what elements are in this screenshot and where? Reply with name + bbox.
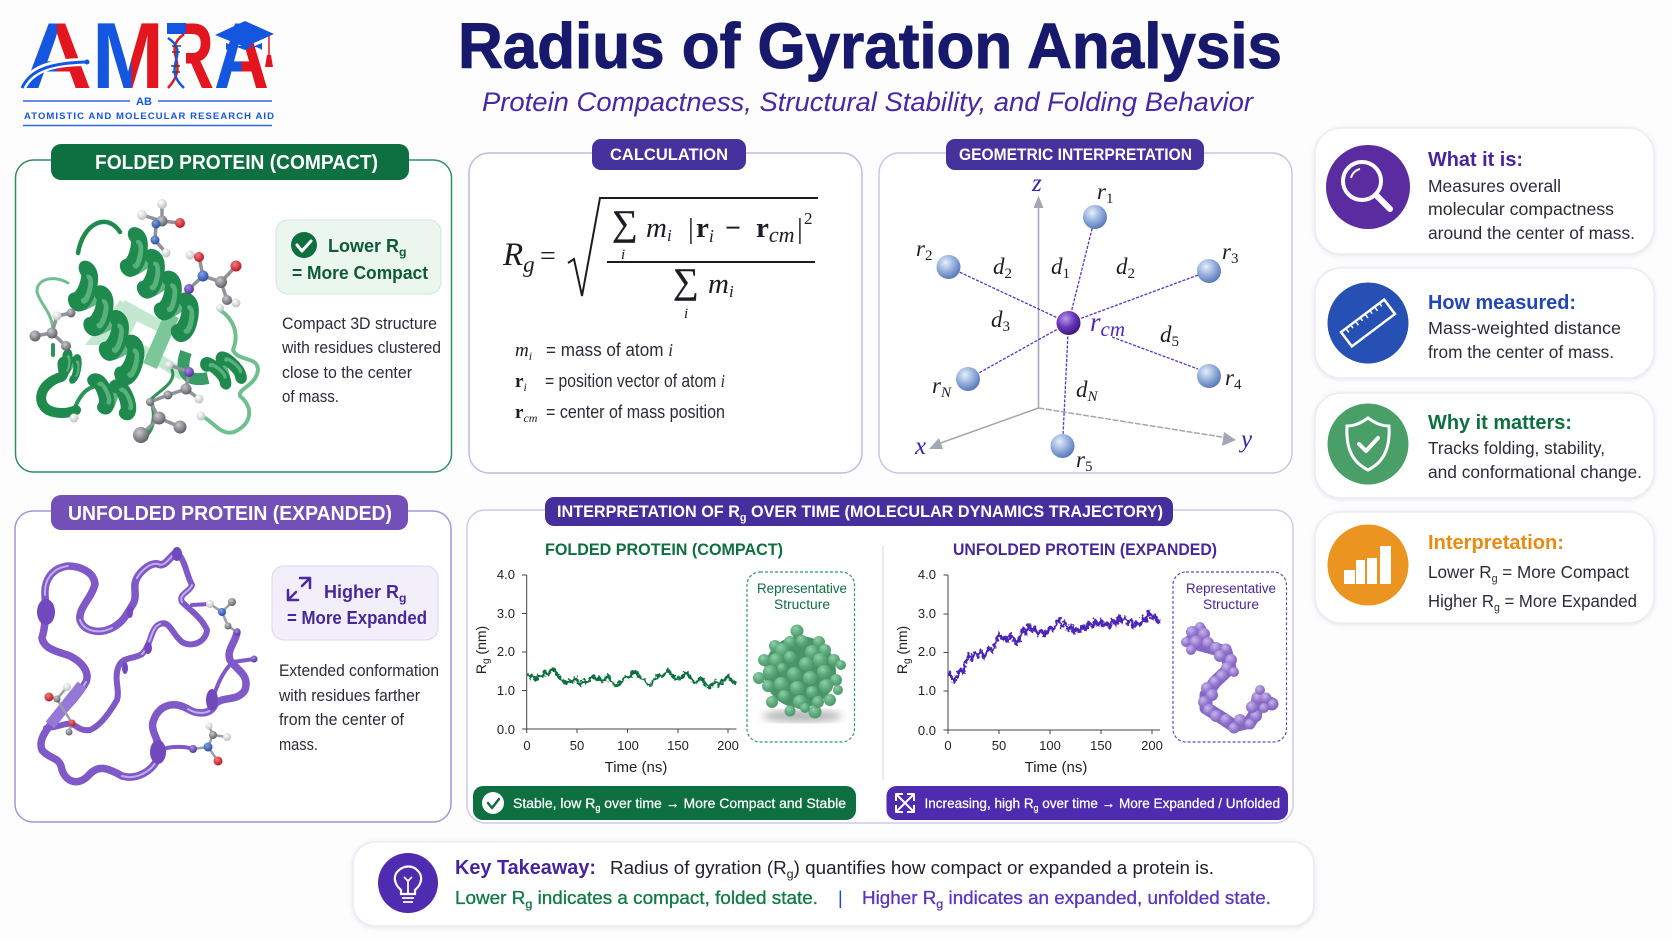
formula: radius of gyration: − [725,213,741,244]
line chart: folded Rg: Time (ns) [605,759,667,776]
diagram: labels: r [1225,365,1234,390]
central strand [150,315,172,366]
formula: radius of gyration: ∑ [673,261,699,301]
heading: Rg over time: g [740,512,747,524]
line chart: unfolded Rg: g [902,658,913,664]
formula: radius of gyration: i [729,282,734,301]
inset: folded representative structure: Structure [774,597,830,612]
diagram: labels: r [916,236,925,261]
panel: key takeaway: Key Takeaway: [455,857,596,879]
panel: key takeaway [353,842,1314,926]
line chart: unfolded Rg: R [894,664,910,674]
card: interpretation: Interpretation: [1428,531,1564,554]
card: what it is: around the center of mass. [1428,223,1635,243]
card: why it matters: Tracks folding, stability, [1428,438,1605,458]
diagram: labels: y [1238,426,1253,453]
inset: unfolded representative structure: Structure [1203,597,1259,612]
heading: unfolded protein [51,495,408,530]
formula: radius of gyration: m [708,268,729,300]
line chart: folded Rg: 150 [667,738,689,753]
helix: right small [206,354,243,387]
inset: folded representative structure [747,572,854,742]
panel: key takeaway: indicates an expanded, unfolded state. [943,888,1271,908]
panel: key takeaway: g [787,867,794,881]
subheading: folded chart: FOLDED PROTEIN (COMPACT) [545,541,783,559]
card: interpretation: Lower R [1428,562,1493,582]
text: folded description: Compact 3D structure [282,314,437,333]
formula: radius of gyration: i [684,306,688,322]
line chart: unfolded Rg: 2.0 [918,644,936,659]
legend: formula variables: cm [523,411,538,425]
logo letters AMRA: A [22,3,92,108]
panel: key takeaway: ) quantifies how compact or expanded a protein is. [794,858,1214,878]
small left coil [41,361,76,413]
icon: expand arrows [896,794,914,812]
line chart: folded Rg: R [473,664,489,674]
line chart: unfolded Rg: 1.0 [918,683,936,698]
line chart: unfolded Rg: 150 [1090,738,1112,753]
logo divider with emblem: AB [136,96,152,108]
diagram: labels: 2 [925,248,932,264]
diagram: labels: d [1051,254,1062,279]
formula: radius of gyration: | [688,213,694,245]
logo letters AMRA: M [92,3,164,108]
icon: graduation cap [215,21,274,67]
line chart: folded Rg: (nm) [473,626,489,658]
legend: formula variables: r [515,402,523,423]
ball-and-stick residues [44,598,258,766]
line chart: folded Rg: 200 [717,738,739,753]
heading: geometric interpretation [946,139,1204,170]
line chart: folded Rg: g [481,658,492,664]
title: Radius of Gyration Analysis [458,10,1282,82]
callout pill: unfolded conclusion: g [1034,803,1038,813]
card: interpretation: Higher R [1428,591,1497,611]
card: interpretation: g [1494,602,1500,614]
panel: key takeaway: g [525,897,532,911]
line chart: unfolded Rg: 0.0 [918,723,936,738]
card: how measured: from the center of mass. [1428,342,1614,362]
callout pill: unfolded conclusion [886,786,1288,820]
diagram: labels: N [1086,389,1098,405]
inset: unfolded representative structure: Representative [1186,581,1276,596]
panel: folded protein [16,144,452,472]
panel: geometric interpretation [879,139,1292,475]
diagram: labels: r [1097,179,1106,204]
panel: Rg over time [467,497,1293,823]
card: interpretation: g [1492,573,1498,585]
heading: calculation: CALCULATION [610,145,728,164]
callout: higher Rg: Higher R [324,582,399,602]
callout: higher Rg: = More Expanded [287,608,427,628]
logo letters AMRA [22,3,269,108]
formula: radius of gyration: g [523,252,535,277]
diagram: labels: cm [1101,317,1125,341]
panel: key takeaway: Higher R [862,888,933,908]
diagram: labels: d [1160,322,1172,347]
callout: lower Rg [276,220,441,294]
heading: Rg over time: INTERPRETATION OF R [557,503,743,521]
logo divider with emblem [23,96,272,126]
panel: key takeaway: | [838,888,843,908]
inset: folded representative structure: Representative [757,581,847,596]
line chart: folded Rg [473,567,739,776]
line chart: unfolded Rg: 0 [944,738,952,753]
illustration: folded protein ribbon [30,199,258,443]
heading: folded protein: FOLDED PROTEIN (COMPACT) [95,152,378,174]
diagram: labels: x [914,433,926,460]
callout pill: folded conclusion [473,786,856,820]
card: interpretation [1315,512,1654,623]
diagram: labels: N [940,385,952,401]
panel: key takeaway: indicates a compact, folded state. [532,888,818,908]
text: folded description [281,314,441,406]
heading: Rg over time [545,497,1173,526]
callout pill: folded conclusion: g [595,803,600,813]
diagram: labels: 3 [1002,319,1010,335]
text: unfolded description: mass. [279,735,318,754]
logo tagline: ATOMISTIC AND MOLECULAR RESEARCH AID [24,111,274,122]
card: how measured [1315,268,1654,378]
line chart: unfolded Rg: 4.0 [918,567,936,582]
card: what it is: What it is: [1428,148,1523,171]
formula: radius of gyration: cm [769,222,795,247]
callout: lower Rg: Lower R [328,236,399,256]
formula: radius of gyration [502,198,818,322]
legend: formula variables [515,340,725,425]
line chart: unfolded Rg: Time (ns) [1025,759,1087,776]
line chart: folded Rg: 3.0 [497,606,515,621]
callout pill: unfolded conclusion: over time → More Expanded / Unfolded [1038,795,1280,811]
formula: radius of gyration: ∑ [612,203,638,243]
formula: radius of gyration: 2 [804,209,812,228]
icon: check [482,792,504,814]
text: unfolded description [278,661,439,754]
card: interpretation: = More Expanded [1500,591,1637,611]
panel: key takeaway: Lower R [455,888,522,908]
card: what it is: Measures overall [1428,176,1561,196]
heading: folded protein [51,144,409,180]
line chart: folded Rg: 50 [570,738,584,753]
ball-and-stick residues [30,199,242,443]
formula: radius of gyration: i [709,226,714,246]
line chart: folded Rg: 1.0 [497,683,515,698]
diagram: labels: d [993,254,1004,279]
card: why it matters: Why it matters: [1428,411,1572,434]
card: how measured: Mass-weighted distance [1428,318,1621,338]
diagram: atoms [936,205,1221,458]
diagram: labels: d [1116,254,1128,279]
panel: calculation [469,139,862,473]
line chart: folded Rg: 2.0 [497,644,515,659]
callout: lower Rg: = More Compact [292,263,428,283]
callout pill: folded conclusion: Stable, low R [513,795,595,811]
heading: unfolded protein: UNFOLDED PROTEIN (EXPANDED) [68,503,392,525]
card: how measured: How measured: [1428,291,1576,314]
line chart: folded Rg: 0 [523,738,531,753]
helix: bottom [89,380,135,414]
panel: key takeaway: g [936,897,943,911]
icon: DNA helix [166,23,186,88]
logo letters AMRA: R [166,3,214,108]
callout pill: folded conclusion: over time → More Compact and Stable [600,795,846,811]
callout: higher Rg: g [399,591,406,605]
panel: key takeaway: Radius of gyration (R [610,858,779,878]
card: why it matters [1315,393,1654,498]
callout: lower Rg: g [399,245,406,259]
legend: formula variables: = position vector of atom i [545,371,725,391]
subheading: unfolded chart: UNFOLDED PROTEIN (EXPANDED) [953,541,1217,559]
legend: formula variables: = mass of atom i [546,340,673,360]
diagram: labels: 3 [1231,251,1238,267]
diagram: labels: d [991,307,1002,332]
line chart: folded Rg: 4.0 [497,567,515,582]
icon: shield [1328,404,1408,484]
diagram: labels: 1 [1062,266,1070,282]
diagram: labels: 1 [1106,191,1113,207]
panel: unfolded protein [15,495,451,822]
card: why it matters: and conformational change. [1428,462,1642,482]
line chart: unfolded Rg: 50 [992,738,1006,753]
legend: formula variables: = center of mass position [546,402,725,422]
formula: radius of gyration: | [797,213,803,245]
diagram: distance lines [948,217,1209,446]
formula: radius of gyration: = [540,241,556,272]
formula: radius of gyration: m [646,212,667,244]
icon: light bulb [378,853,438,913]
formula: radius of gyration: r [756,212,769,244]
legend: formula variables: r [515,371,523,392]
heading: calculation [592,139,746,170]
icon: expand arrows [288,578,310,600]
text: unfolded description: with residues farther [278,686,420,705]
diagram: labels: 4 [1234,377,1242,393]
line chart: folded Rg: 0.0 [497,722,515,737]
legend: formula variables: m [515,340,529,361]
line chart: unfolded Rg: 200 [1141,738,1163,753]
diagram: labels: 5 [1085,459,1092,475]
icon: ruler [1328,282,1408,364]
heading: geometric interpretation: GEOMETRIC INTERPRETATION [959,145,1192,164]
diagram: labels: 2 [1128,266,1135,282]
line chart: unfolded Rg: 3.0 [918,606,936,621]
callout: higher Rg [272,566,438,640]
diagram: labels: r [932,373,941,398]
icon: bar chart [1328,524,1408,606]
diagram: labels: 2 [1004,266,1012,282]
inset: unfolded representative structure [1173,572,1286,742]
diagram: labels: r [1222,239,1231,264]
icon: magnifier [1326,145,1410,229]
legend: formula variables: i [529,349,532,363]
line chart: folded Rg: 100 [617,738,639,753]
diagram: labels: r [1090,307,1101,337]
text: unfolded description: from the center of [279,710,404,729]
diagram: labels: 5 [1172,334,1179,350]
line chart: unfolded Rg: 100 [1039,738,1061,753]
text: folded description: of mass. [282,387,339,406]
text: folded description: close to the center [282,363,412,382]
icon: check badge [291,232,317,258]
formula: radius of gyration: i [621,247,625,263]
formula: radius of gyration: i [667,226,672,245]
illustration: unfolded protein tube [37,547,258,782]
card: interpretation: = More Compact [1498,562,1629,582]
callout pill: unfolded conclusion: Increasing, high R [924,795,1037,811]
heading: Rg over time: OVER TIME (MOLECULAR DYNAMICS TRAJECTORY) [747,503,1163,521]
diagram: axes [929,196,1236,449]
formula: radius of gyration: R [503,237,523,273]
logo letters AMRA: A [214,3,269,108]
diagram: labels [914,170,1253,475]
line chart: unfolded Rg [894,567,1163,776]
subtitle: Protein Compactness, Structural Stability, and Folding Behavior [482,87,1254,117]
diagram: labels: z [1031,170,1042,197]
card: what it is [1315,128,1654,254]
logo [22,3,274,126]
card: what it is: molecular compactness [1428,199,1614,219]
line chart: unfolded Rg: (nm) [894,626,910,658]
diagram: labels: r [1076,447,1085,472]
text: unfolded description: Extended conformation [279,661,439,680]
formula: radius of gyration: r [696,212,709,244]
legend: formula variables: i [523,380,527,394]
diagram: labels: d [1076,377,1088,402]
text: folded description: with residues clustered [281,338,441,357]
